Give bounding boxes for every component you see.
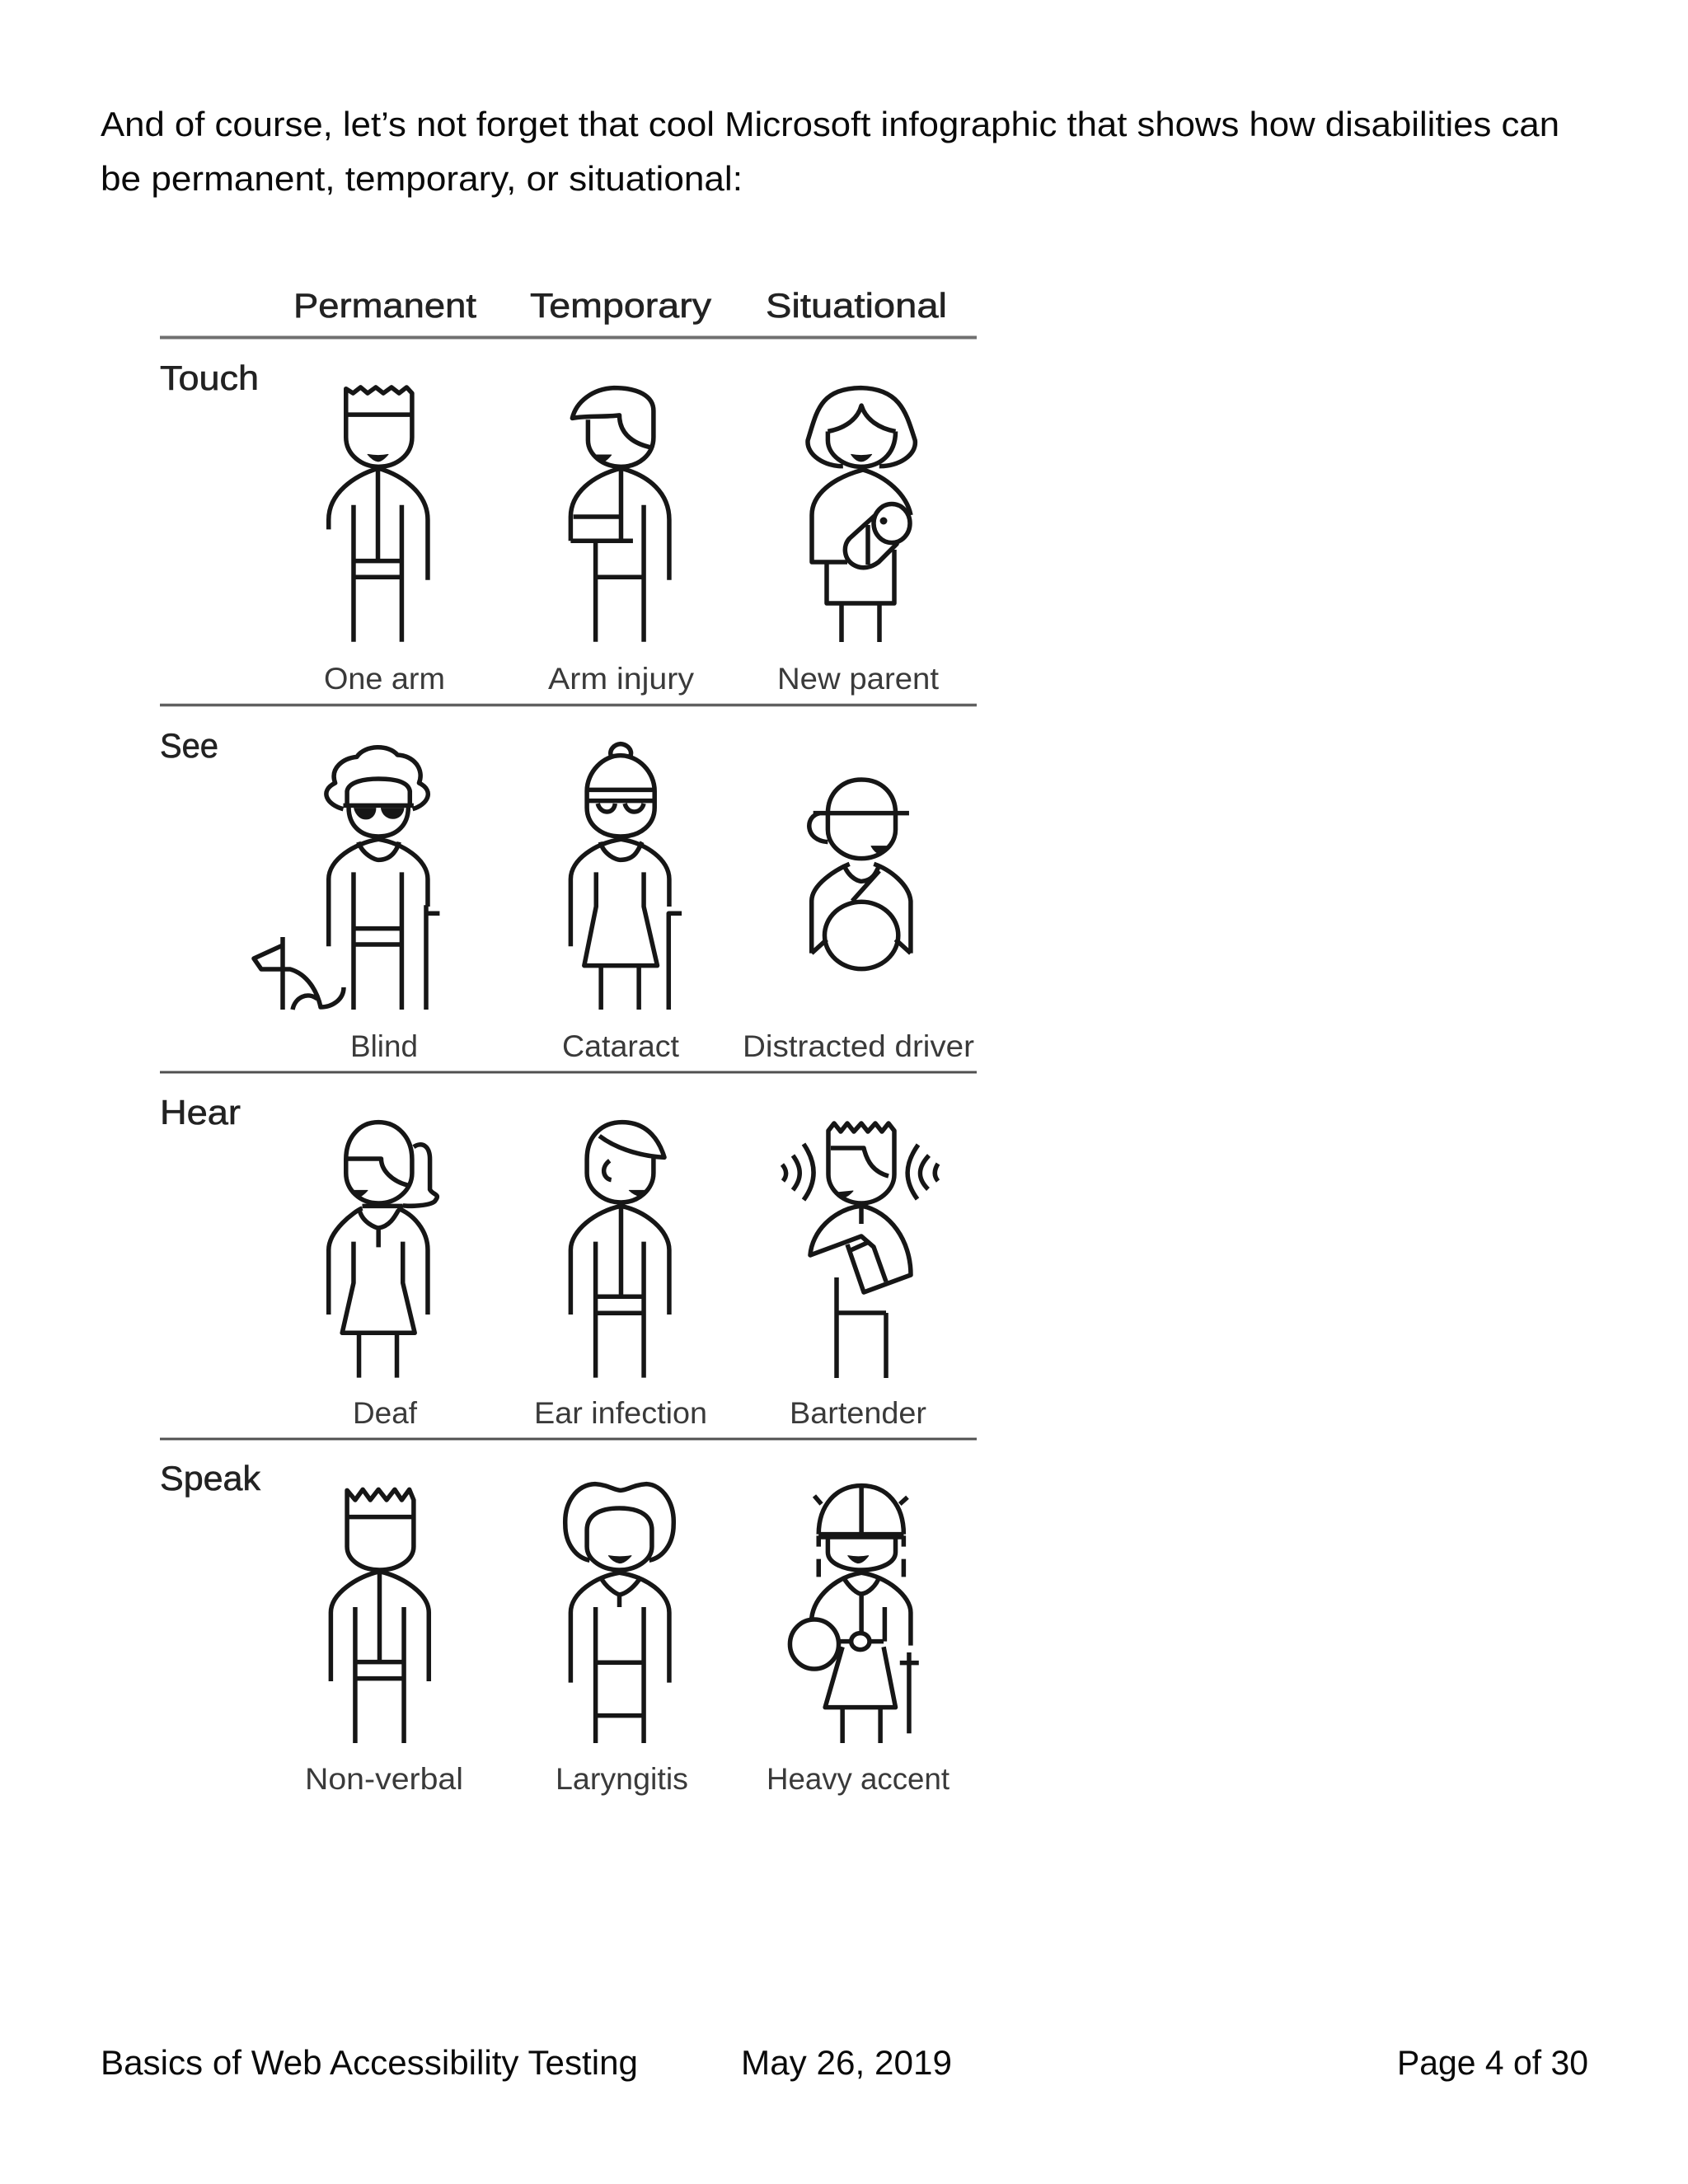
icon: heavy accent figure with shield and sword xyxy=(790,1486,919,1743)
icon: bartender figure with sound waves xyxy=(782,1123,938,1378)
icon: distracted driver figure xyxy=(809,780,911,969)
row heading: Speak: Speak xyxy=(160,1459,261,1497)
label: blind: Blind xyxy=(350,1029,418,1063)
label: one arm: One arm xyxy=(324,662,445,696)
icon: one arm figure xyxy=(329,387,428,642)
icon: deaf figure xyxy=(329,1122,437,1378)
row heading: Touch: Touch xyxy=(160,359,259,397)
label: distracted driver: Distracted driver xyxy=(743,1029,974,1063)
label: cataract: Cataract xyxy=(562,1029,680,1063)
icon: blind figure with dog and cane xyxy=(254,748,439,1010)
label: arm injury: Arm injury xyxy=(548,662,695,696)
footer: Basics of Web Accessibility Testing xyxy=(101,2043,638,2082)
intro paragraph: And of course, let’s not forget that cool Microsoft infographic that shows how disabilities can xyxy=(101,105,1559,143)
icon: cataract figure with cane xyxy=(570,744,682,1010)
intro paragraph: be permanent, temporary, or situational: xyxy=(101,159,743,198)
footer: Page 4 of 30 xyxy=(1397,2043,1588,2082)
footer: May 26, 2019 xyxy=(741,2043,952,2082)
icon: ear infection figure xyxy=(570,1122,669,1378)
footer xyxy=(101,2043,1588,2082)
label: bartender: Bartender xyxy=(790,1396,926,1430)
column headings: Permanent xyxy=(293,286,476,325)
label: laryngitis: Laryngitis xyxy=(556,1762,688,1796)
column headings xyxy=(293,286,947,325)
label: deaf: Deaf xyxy=(353,1396,418,1430)
label: non-verbal: Non-verbal xyxy=(305,1762,463,1796)
label: heavy accent: Heavy accent xyxy=(767,1762,950,1796)
icon: non-verbal figure xyxy=(331,1489,429,1743)
row heading: See: See xyxy=(160,726,218,765)
icon: laryngitis figure xyxy=(565,1484,673,1743)
label: ear infection: Ear infection xyxy=(534,1396,707,1430)
column headings: Temporary xyxy=(530,286,711,325)
icon: arm injury figure xyxy=(570,388,669,642)
row heading: Hear: Hear xyxy=(160,1093,241,1132)
label: new parent: New parent xyxy=(777,662,940,696)
matrix infographic xyxy=(160,286,977,1796)
intro paragraph xyxy=(101,105,1559,198)
icon: new parent figure xyxy=(808,388,915,642)
column headings: Situational xyxy=(766,286,947,325)
